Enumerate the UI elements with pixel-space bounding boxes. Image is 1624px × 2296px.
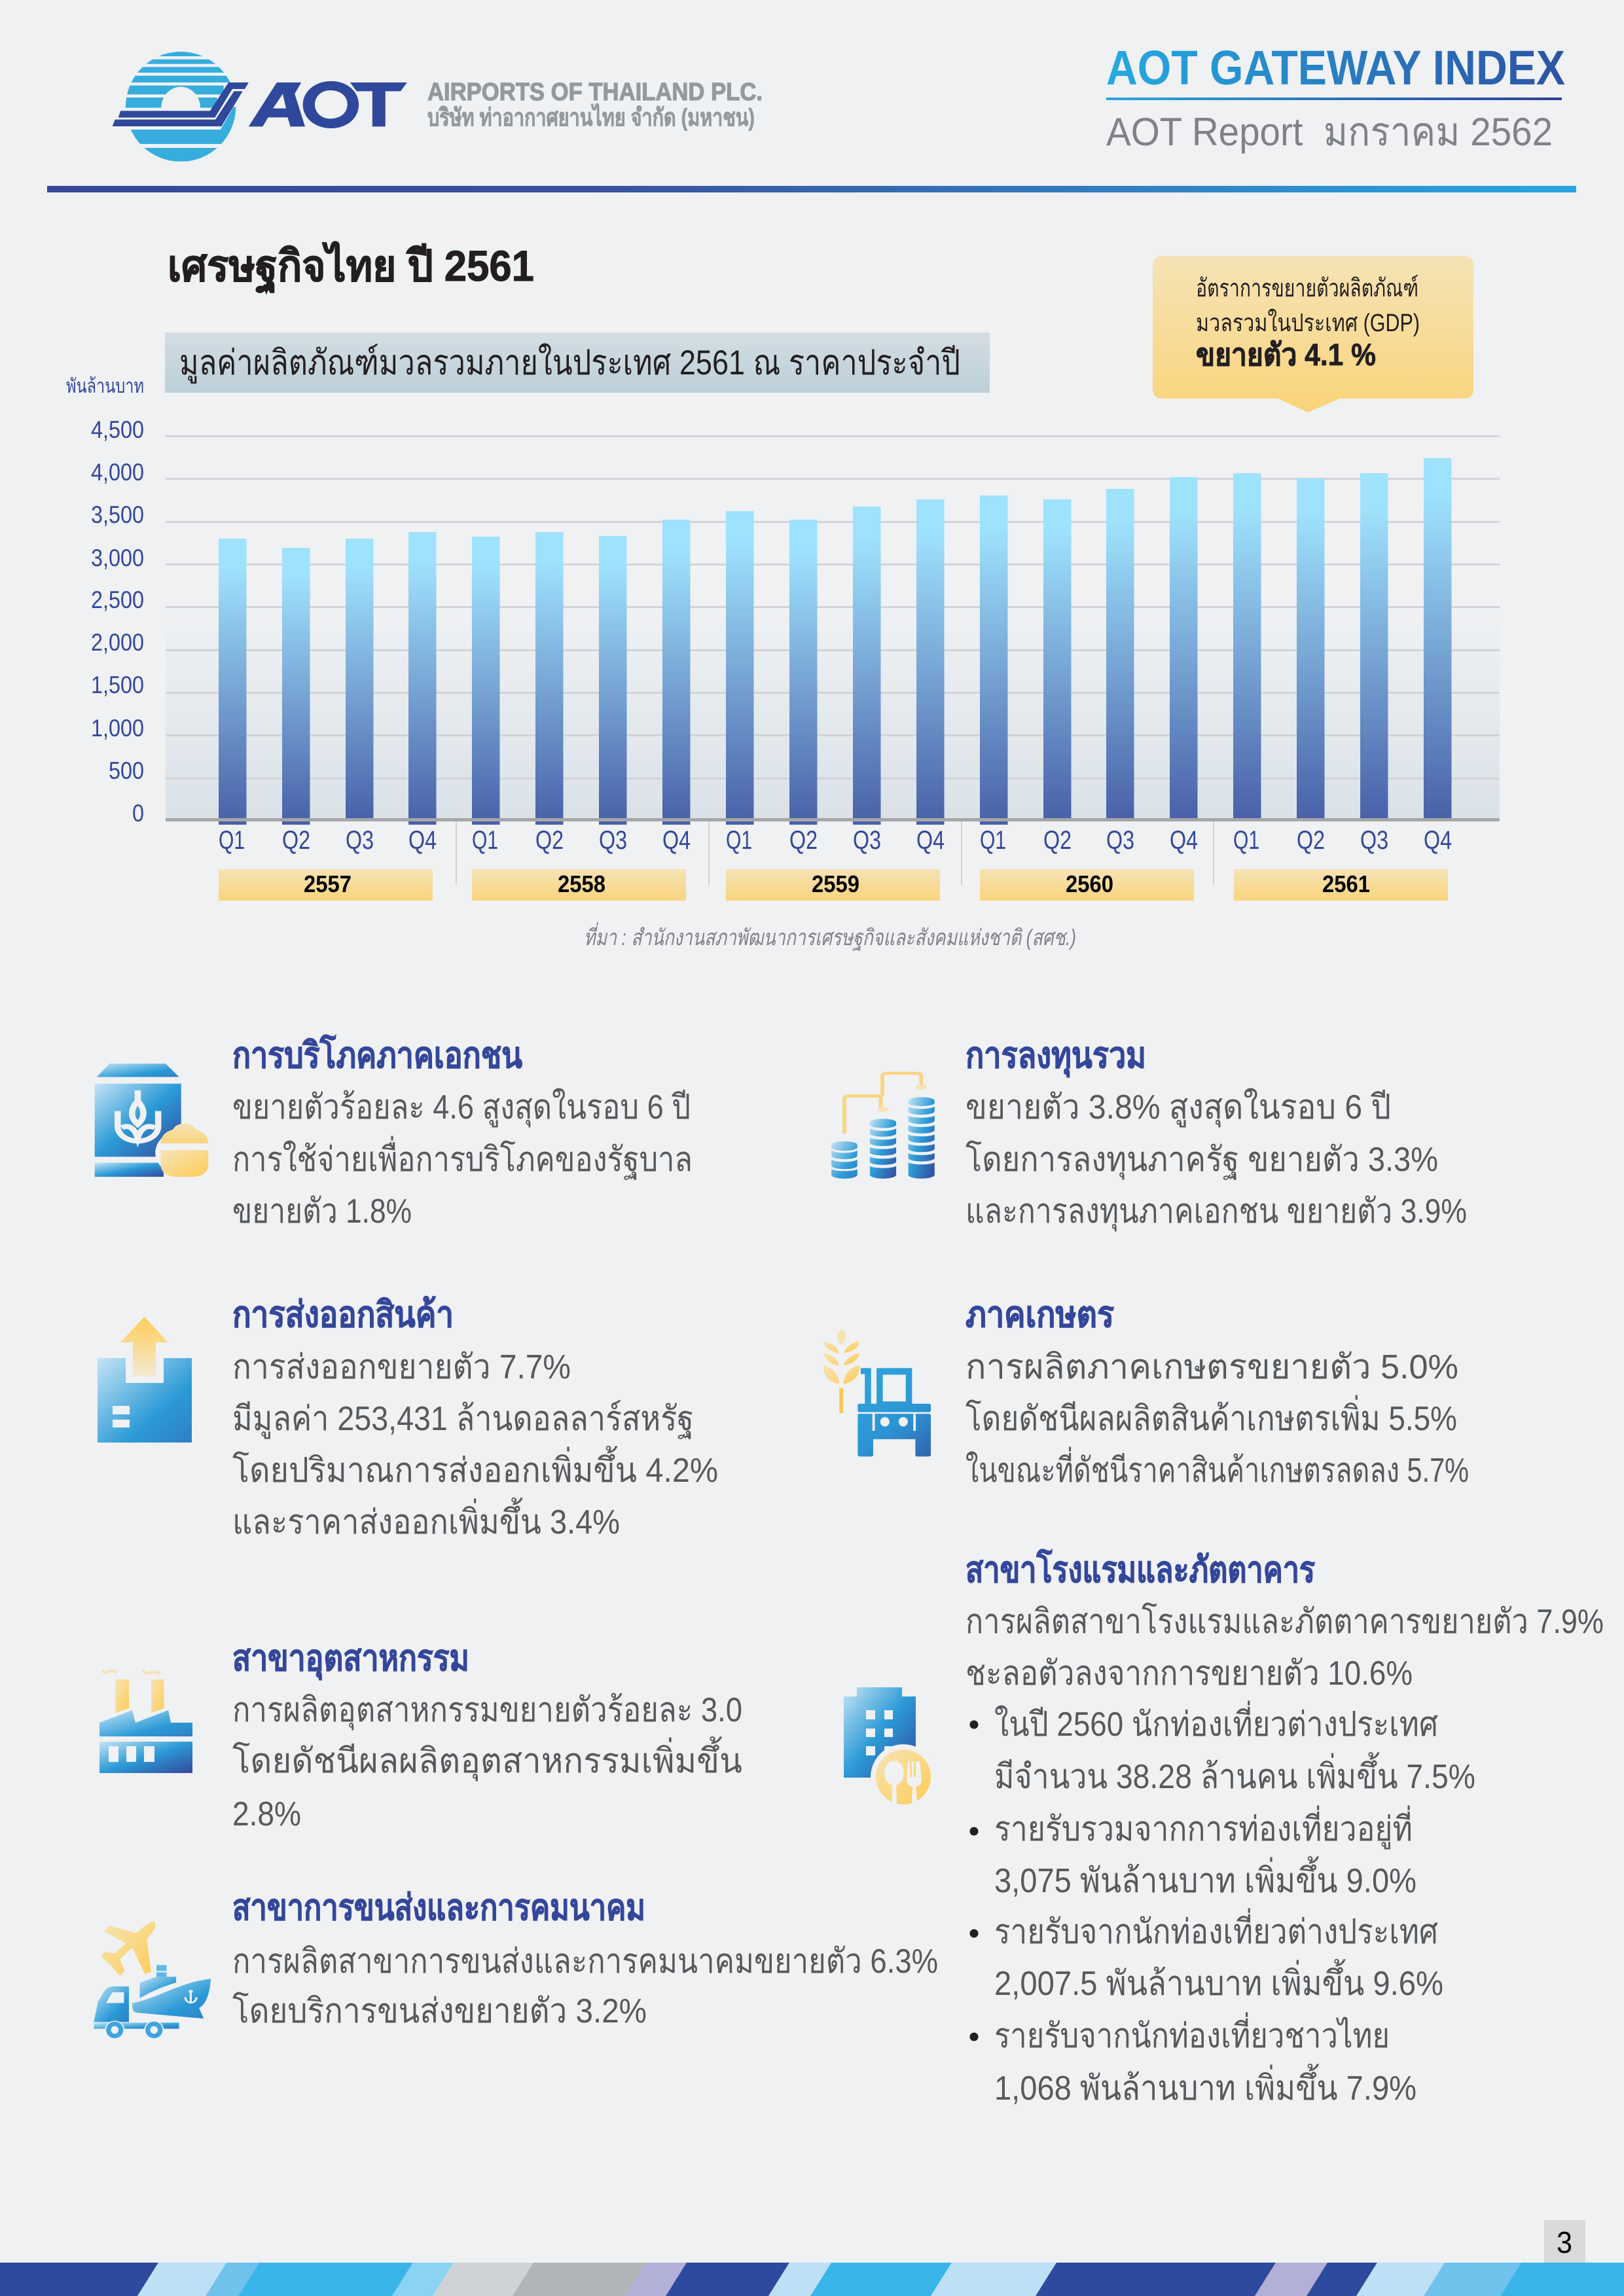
body text: ขยายตัวร้อยละ 4.6 สูงสุดในรอบ 6 ปี: [232, 1088, 691, 1128]
body text: การใช้จ่ายเพื่อการบริโภคของรัฐบาล: [232, 1136, 693, 1179]
quarter labels: Q3: [1360, 826, 1388, 855]
heading: สาขาการขนส่งและการคมนาคม: [232, 1887, 645, 1928]
quarter labels: Q2: [1043, 826, 1072, 855]
body text: มีมูลค่า 253,431 ล้านดอลลาร์สหรัฐ: [232, 1400, 694, 1439]
icon: wheat and tractor: [823, 1329, 931, 1456]
report subtitle: AOT Report มกราคม 2562: [1106, 110, 1553, 154]
body text: ขยายตัว 1.8%: [232, 1193, 412, 1230]
panel: total investment: [831, 1035, 1467, 1232]
y axis labels: 2,000: [91, 629, 144, 656]
quarter labels: [219, 826, 1452, 855]
y axis unit: พันล้านบาท: [66, 376, 144, 397]
y axis labels: 1,000: [91, 715, 144, 742]
year boxes: 2561: [1322, 870, 1370, 897]
body text: โดยบริการขนส่งขยายตัว 3.2%: [232, 1992, 647, 2030]
page number: 3: [1557, 2225, 1572, 2259]
body text: โดยการลงทุนภาครัฐ ขยายตัว 3.3%: [965, 1140, 1438, 1180]
body text: การผลิตอุตสาหกรรมขยายตัวร้อยละ 3.0: [232, 1691, 742, 1731]
callout: GDP growth: มวลรวมในประเทศ (GDP): [1196, 309, 1420, 337]
body text: รายรับจากนักท่องเที่ยวชาวไทย: [994, 2012, 1390, 2055]
year boxes: 2557: [304, 870, 352, 897]
body text: และราคาส่งออกเพิ่มขึ้น 3.4%: [232, 1498, 620, 1541]
icon: goods bag: [95, 1064, 213, 1177]
quarter labels: Q1: [1233, 826, 1259, 855]
body text: โดยดัชนีผลผลิตสินค้าเกษตรเพิ่ม 5.5%: [965, 1395, 1457, 1438]
heading: การลงทุนรวม: [965, 1035, 1146, 1078]
quarter labels: Q4: [408, 826, 437, 855]
body text: [232, 1943, 938, 2030]
quarter labels: Q1: [980, 826, 1006, 855]
y axis labels: 3,000: [91, 545, 144, 571]
y axis labels: 4,000: [91, 459, 144, 486]
report title underline: [1106, 98, 1562, 100]
quarter labels: Q3: [853, 826, 881, 855]
body text: [232, 1348, 718, 1541]
year boxes: 2560: [1066, 870, 1113, 897]
year separators: [456, 821, 1214, 885]
body text: การผลิตสาขาการขนส่งและการคมนาคมขยายตัว 6.3%: [232, 1943, 938, 1981]
report title: AOT GATEWAY INDEX: [1106, 41, 1565, 95]
body text: [965, 1348, 1469, 1490]
year boxes: 2558: [558, 870, 605, 897]
body text: 3,075 พันล้านบาท เพิ่มขึ้น 9.0%: [994, 1856, 1416, 1900]
quarter labels: Q2: [1297, 826, 1325, 855]
body text: [965, 1088, 1467, 1232]
quarter labels: Q4: [1424, 826, 1452, 855]
quarter labels: Q1: [726, 826, 752, 855]
panel: exports: [98, 1294, 718, 1541]
body text: [965, 1602, 1604, 2108]
body text: [232, 1088, 693, 1230]
y axis labels: 3,500: [91, 501, 144, 528]
y axis labels: 500: [109, 757, 144, 784]
body text: มีจำนวน 38.28 ล้านคน เพิ่มขึ้น 7.5%: [994, 1752, 1475, 1796]
heading: การบริโภคภาคเอกชน: [232, 1034, 522, 1075]
footer stripes: [0, 2263, 1624, 2296]
chart title band: มูลค่าผลิตภัณฑ์มวลรวมภายในประเทศ 2561 ณ ราคาประจำปี: [179, 343, 960, 384]
body text: 1,068 พันล้านบาท เพิ่มขึ้น 7.9%: [994, 2064, 1416, 2108]
year boxes: 2559: [812, 870, 859, 897]
y axis labels: 4,500: [91, 416, 144, 443]
logo: AOT emblem and wordmark: [109, 52, 407, 162]
body text: โดยปริมาณการส่งออกเพิ่มขึ้น 4.2%: [232, 1446, 718, 1490]
body text: รายรับรวมจากการท่องเที่ยวอยู่ที่: [994, 1805, 1413, 1850]
baseline axis: [166, 818, 1500, 821]
company name English: AIRPORTS OF THAILAND PLC.: [427, 79, 763, 106]
company name Thai: บริษัท ท่าอากาศยานไทย จำกัด (มหาชน): [427, 103, 755, 131]
bullets: [970, 1720, 978, 2041]
callout: GDP growth: [1153, 256, 1473, 412]
y axis labels: [91, 416, 144, 827]
panel: agriculture: [823, 1294, 1469, 1490]
heading: สาขาโรงแรมและภัตตาคาร: [965, 1549, 1315, 1590]
body text: รายรับจากนักท่องเที่ยวต่างประเทศ: [994, 1908, 1438, 1951]
quarter labels: Q3: [1106, 826, 1134, 855]
body text: 2.8%: [232, 1795, 301, 1833]
heading: สาขาอุตสาหกรรม: [232, 1638, 469, 1681]
body text: การส่งออกขยายตัว 7.7%: [232, 1348, 571, 1386]
page number: [1544, 2220, 1585, 2263]
y axis labels: 1,500: [91, 672, 144, 698]
body text: ในขณะที่ดัชนีราคาสินค้าเกษตรลดลง 5.7%: [965, 1446, 1469, 1490]
body text: ในปี 2560 นักท่องเที่ยวต่างประเทศ: [994, 1700, 1438, 1744]
icon: export box with arrow: [98, 1317, 192, 1443]
icon: hotel building with dining plate: [844, 1687, 936, 1810]
quarter labels: Q4: [916, 826, 945, 855]
callout: GDP growth: อัตราการขยายตัวผลิตภัณฑ์: [1196, 274, 1418, 302]
quarter labels: Q3: [599, 826, 627, 855]
chart title band: [165, 332, 990, 393]
quarter labels: Q1: [472, 826, 498, 855]
quarter labels: Q3: [346, 826, 374, 855]
body text: การผลิตภาคเกษตรขยายตัว 5.0%: [965, 1348, 1458, 1386]
callout: GDP growth: ขยายตัว 4.1 %: [1196, 337, 1376, 372]
heading: ภาคเกษตร: [965, 1294, 1114, 1335]
quarter labels: Q2: [282, 826, 310, 855]
body text: โดยดัชนีผลผลิตอุตสาหกรรมเพิ่มขึ้น: [232, 1736, 742, 1782]
section title: เศรษฐกิจไทย ปี 2561: [168, 241, 534, 294]
quarter labels: Q4: [1170, 826, 1198, 855]
quarter labels: Q4: [662, 826, 691, 855]
bar chart: GDP 2557-2561: [66, 376, 1500, 901]
body text: 2,007.5 พันล้านบาท เพิ่มขึ้น 9.6%: [994, 1959, 1443, 2003]
body text: ชะลอตัวลงจากการขยายตัว 10.6%: [965, 1655, 1413, 1693]
icon: coins with arrows: [831, 1073, 935, 1179]
body text: ขยายตัว 3.8% สูงสุดในรอบ 6 ปี: [965, 1088, 1391, 1128]
icon: factory: [99, 1670, 192, 1773]
heading: การส่งออกสินค้า: [232, 1294, 454, 1335]
bars: [219, 458, 1452, 825]
year boxes: [219, 869, 1448, 901]
quarter labels: Q2: [789, 826, 818, 855]
y axis labels: 0: [132, 800, 144, 827]
icon: plane, truck, ship: [94, 1922, 211, 2039]
panel: hotels and restaurants: [844, 1549, 1604, 2108]
header rule: [47, 186, 1576, 192]
source note: ที่มา : สำนักงานสภาพัฒนาการเศรษฐกิจและสังคมแห่งชาติ (สศช.): [584, 922, 1076, 951]
panel: transport: [94, 1887, 938, 2039]
quarter labels: Q1: [219, 826, 245, 855]
panel: industry: [99, 1638, 742, 1833]
panel: private consumption: [95, 1034, 693, 1230]
quarter labels: Q2: [535, 826, 564, 855]
y axis labels: 2,500: [91, 586, 144, 613]
body text: [232, 1691, 742, 1833]
body text: และการลงทุนภาคเอกชน ขยายตัว 3.9%: [965, 1193, 1467, 1232]
